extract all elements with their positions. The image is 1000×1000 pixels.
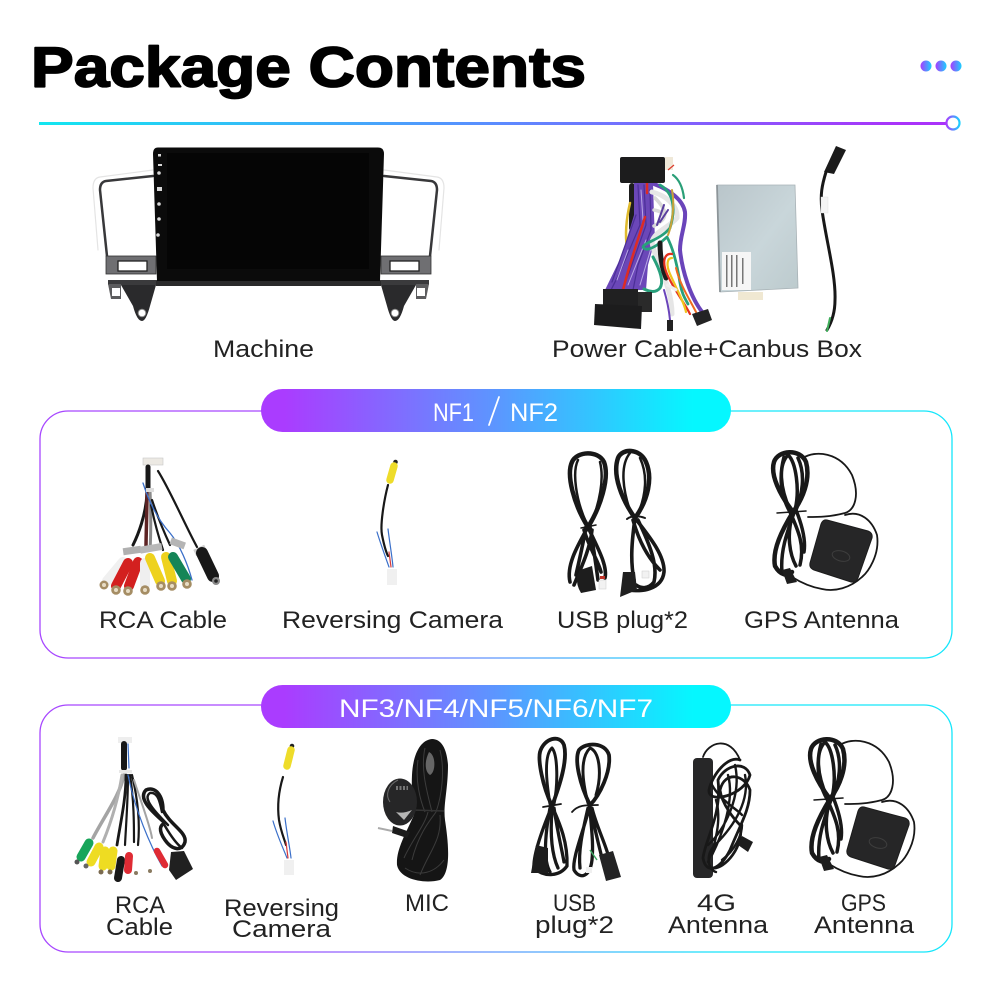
label: GPS Antenna	[814, 890, 915, 939]
icon: three dots	[920, 60, 962, 72]
left trim frame	[93, 170, 158, 321]
product: machine head unit	[93, 148, 444, 321]
label: RCA Cable: RCA	[115, 892, 165, 919]
product: adapter lead	[821, 146, 846, 331]
top connector	[620, 157, 665, 183]
icon: GPS antenna	[773, 452, 877, 590]
heading pill: NF2	[510, 399, 558, 427]
heading pill: NF3/NF4/NF5/NF6/NF7	[339, 695, 653, 723]
bottom connectors	[603, 289, 638, 307]
label: Power Cable+Canbus Box: Power Cable+Canbus Box	[552, 336, 862, 363]
label: USB plug*2: USB	[553, 890, 596, 917]
label: MIC: MIC	[405, 890, 449, 917]
label: 4G Antenna	[668, 890, 769, 939]
wire bundle	[605, 175, 703, 320]
label: USB plug*2: USB plug*2	[557, 607, 688, 634]
label: Reversing Camera: Reversing	[224, 895, 339, 922]
label: Machine: Machine	[213, 336, 314, 363]
icon: GPS antenna	[810, 739, 914, 877]
panel: NF1 / NF2	[40, 389, 952, 658]
icon: reversing camera cable	[377, 460, 398, 585]
label: USB plug*2: plug*2	[535, 912, 614, 939]
label: GPS Antenna: Antenna	[814, 912, 915, 939]
label: 4G Antenna: 4G	[697, 890, 736, 917]
side touch buttons	[156, 154, 162, 237]
title: Package Contents	[31, 36, 586, 100]
heading pill	[261, 685, 731, 728]
touchscreen	[153, 148, 384, 281]
icon: RCA cable with USB	[74, 737, 193, 880]
header rule with end ring	[39, 116, 960, 130]
icon: USB plug cables	[569, 451, 664, 597]
label: GPS Antenna: GPS Antenna	[744, 607, 900, 634]
label: RCA Cable: Cable	[106, 914, 173, 941]
product: canbus box	[717, 185, 798, 300]
label: Reversing Camera	[224, 895, 339, 943]
label: USB plug*2	[535, 890, 614, 939]
heading pill: NF1	[433, 399, 474, 427]
icon: reversing camera cable	[273, 744, 294, 875]
product: power cable harness	[594, 157, 712, 331]
label: Reversing Camera: Camera	[232, 916, 332, 943]
icon: microphone	[378, 739, 448, 881]
label: 4G Antenna: Antenna	[668, 912, 769, 939]
icon: RCA cable	[100, 458, 220, 596]
label: GPS Antenna: GPS	[841, 890, 886, 917]
panel: NF3/NF4/NF5/NF6/NF7	[40, 685, 952, 952]
label: Reversing Camera: Reversing Camera	[282, 607, 504, 634]
right trim frame	[379, 170, 444, 321]
label: RCA Cable: RCA Cable	[99, 607, 227, 634]
heading pill	[261, 389, 731, 432]
icon: 4G antenna	[693, 743, 753, 878]
label: RCA Cable	[106, 892, 173, 941]
icon: USB plug cables	[531, 739, 621, 881]
